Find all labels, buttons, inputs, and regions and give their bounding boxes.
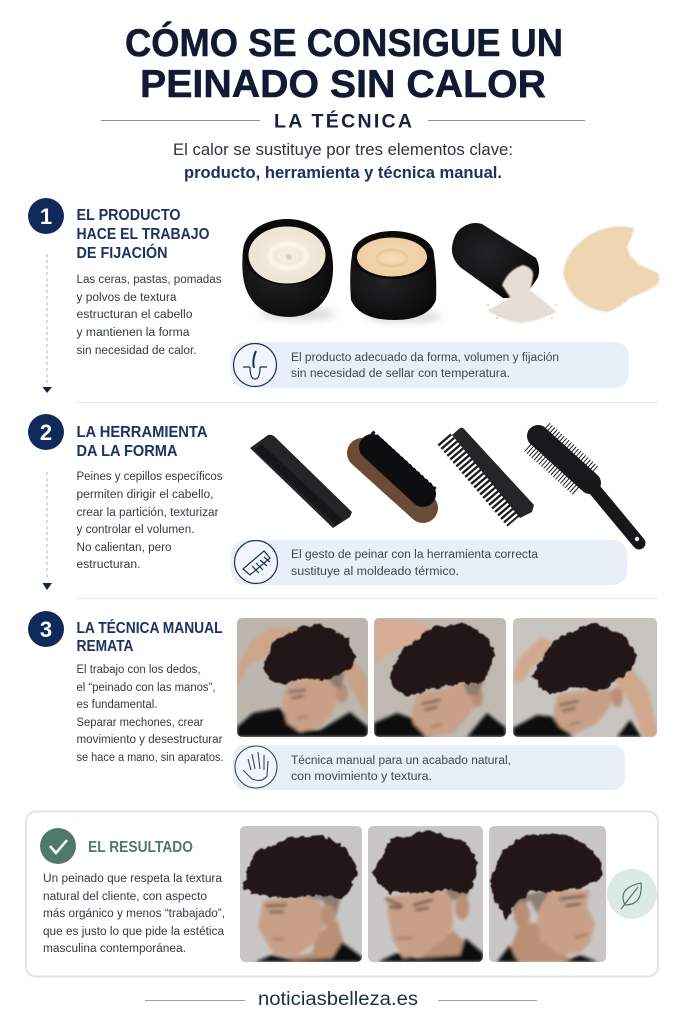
product: cream swatch (563, 226, 659, 312)
heading step 1: EL PRODUCTO (76, 207, 180, 224)
panel: el resultado (26, 812, 658, 976)
title: PEINADO SIN CALOR (140, 63, 546, 106)
arrow step 2 (42, 472, 52, 590)
number badge 2 (28, 414, 64, 450)
body text step 2: estructuran. (76, 559, 140, 571)
tool: wide comb (444, 428, 534, 521)
body text step 2: Peines y cepillos específicos (76, 471, 223, 483)
body text resultado: masculina contemporánea. (43, 943, 186, 955)
callout 1: sin necesidad de sellar con temperatura. (291, 368, 510, 380)
heading step 3: REMATA (76, 638, 134, 655)
heading step 2: DA LA FORMA (76, 443, 178, 460)
tool: fine comb (250, 435, 352, 528)
panel: step 2 herramienta (28, 414, 639, 590)
footer: noticiasbelleza.es (258, 989, 418, 1010)
body text resultado: que es justo lo que pide la estética (43, 926, 225, 938)
photo: result front (368, 826, 483, 962)
intro text: producto, herramienta y técnica manual. (184, 164, 502, 182)
body text step 1: y mantienen la forma (76, 327, 190, 339)
body text step 3: movimiento y desestructurar (76, 734, 223, 746)
photo: hands styling 1 (237, 618, 368, 737)
number badge 3: 3 (40, 617, 52, 642)
body text step 1: y polvos de textura (76, 292, 177, 304)
heading step 1: HACE EL TRABAJO (76, 226, 210, 243)
heading step 1: DE FIJACIÓN (76, 244, 168, 262)
icon: hand (235, 746, 277, 788)
body text step 1: sin necesidad de calor. (76, 345, 196, 357)
heading step 1 (76, 207, 210, 262)
number badge 1 (28, 198, 64, 234)
body text step 3 (76, 664, 224, 764)
body text step 1: estructuran el cabello (76, 309, 192, 321)
body text step 3: Separar mechones, crear (76, 717, 204, 729)
photo: result left profile (240, 826, 362, 962)
body text step 1: Las ceras, pastas, pomadas (76, 274, 222, 286)
body text resultado (43, 873, 225, 955)
subtitle: la técnica: LA TÉCNICA (274, 110, 412, 132)
body text step 3: se hace a mano, sin aparatos. (76, 752, 224, 764)
intro text (173, 141, 513, 182)
intro text: El calor se sustituye por tres elementos clave: (173, 141, 513, 159)
callout 3: con movimiento y textura. (291, 771, 432, 783)
body text resultado: natural del cliente, con aspecto (43, 891, 207, 903)
body text step 3: El trabajo con los dedos, (76, 664, 200, 676)
callout 2: sustituye al moldeado térmico. (291, 566, 459, 578)
arrow step 1 (42, 254, 52, 393)
number badge 1: 1 (40, 204, 52, 229)
callout 3 (233, 745, 625, 790)
body text step 2: No calientan, pero (76, 542, 172, 554)
callout 1: El producto adecuado da forma, volumen y fijación (291, 352, 559, 364)
photo: result right profile (489, 826, 606, 962)
body text step 2: y controlar el volumen. (76, 524, 194, 536)
body text resultado: Un peinado que respeta la textura (43, 873, 223, 885)
heading step 2: LA HERRAMIENTA (76, 424, 208, 441)
icon: comb (234, 540, 278, 584)
product: cream jar (242, 219, 336, 320)
heading step 3 (76, 620, 222, 655)
body text step 3: es fundamental. (76, 699, 158, 711)
photo: hands styling 2 (374, 618, 506, 737)
title: CÓMO SE CONSIGUE UN (125, 21, 563, 65)
callout 1 (231, 342, 629, 388)
body text step 3: el “peinado con las manos”, (76, 682, 216, 694)
icon: leaf (607, 869, 657, 919)
title (125, 21, 563, 106)
body text step 2 (76, 471, 223, 571)
number badge 2: 2 (40, 420, 52, 445)
photo: hands styling 3 (513, 618, 657, 737)
callout 2 (231, 540, 627, 585)
callout 3: Técnica manual para un acabado natural, (291, 755, 511, 767)
number badge 3 (28, 611, 64, 647)
icon: check (40, 828, 76, 864)
heading step 3: LA TÉCNICA MANUAL (76, 620, 222, 637)
body text resultado: más orgánico y menos “trabajado”, (43, 908, 225, 920)
product: paste jar (350, 231, 442, 322)
body text step 1 (76, 274, 222, 357)
heading resultado: EL RESULTADO (88, 839, 193, 856)
tool: round brush (537, 436, 639, 543)
body text step 2: crear la partición, texturizar (76, 507, 219, 519)
heading step 2 (76, 424, 208, 460)
icon: hair follicle (234, 344, 276, 386)
tool: wood brush (362, 432, 437, 508)
body text step 2: permiten dirigir el cabello, (76, 489, 214, 501)
panel: step 3 técnica manual (28, 611, 657, 790)
panel: step 1 producto (28, 198, 659, 393)
callout 2: El gesto de peinar con la herramienta correcta (291, 549, 539, 561)
product: powder canister (452, 223, 557, 323)
